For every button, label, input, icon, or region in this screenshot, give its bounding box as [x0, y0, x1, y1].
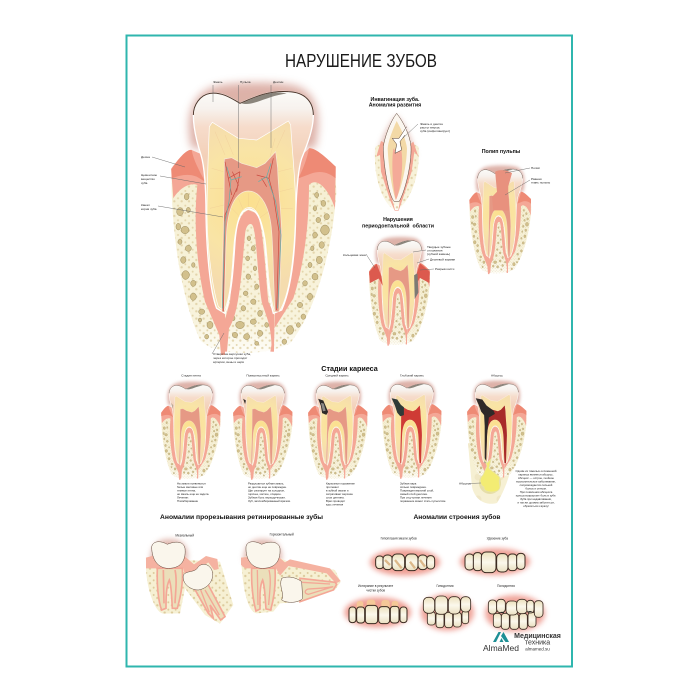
invagination callout: зуба (инфолинирует) [420, 129, 450, 133]
main tooth labels [141, 80, 284, 364]
main tooth labels: Эмаль [213, 80, 223, 84]
frame border [126, 36, 572, 666]
row: enamel hypoplasia [370, 536, 440, 576]
stage 2: surface caries: но дентин еще не поврежден. [248, 485, 287, 489]
periodontal labels: отложения [427, 248, 443, 252]
row: enamel hypoplasia: Гипоплазия эмали зубов [381, 536, 417, 540]
stage 1: spot: Пломбирование [177, 499, 199, 503]
periodontal labels: Кольцевая зона [343, 253, 366, 257]
stage 2: surface caries [233, 374, 293, 503]
stage 5: abscess: болью и отеком. [525, 486, 547, 490]
stage 1: spot [161, 374, 221, 503]
periodontal labels: Твердые зубные [427, 245, 451, 249]
retained teeth diagrams [146, 533, 341, 624]
stage 5: abscess: кариеса является абсцесс. [519, 472, 554, 476]
main tooth labels: Цементное [141, 173, 157, 177]
stage 3: middle caries: курс лечения [326, 502, 344, 506]
main tooth labels: вещество [141, 177, 155, 181]
row: abrasion: Истирание в результате [358, 584, 393, 588]
stage 1: spot: белые меловые или [177, 485, 204, 489]
stage 4: deep caries: Поврежден верхний слой, [400, 488, 434, 492]
row: hypodontia [421, 584, 474, 631]
stage 3: middle caries: протекает [326, 485, 340, 489]
main tooth labels: Канал [141, 203, 150, 207]
invagination callout: растут внутрь [420, 126, 440, 130]
main tooth labels: зуба [141, 181, 148, 185]
stage 2: surface caries: Щит реагирует на холодное, [248, 488, 285, 492]
heading: invagination: Инвагинация зуба. [371, 96, 420, 103]
retained teeth diagrams: Горизонтальный [270, 533, 294, 537]
heading: invagination: Аномалия развития [369, 102, 421, 108]
stage 5: abscess: Абсцесс [491, 374, 503, 378]
panel: caries stages [161, 364, 557, 508]
row: hypodontia: Гиподонтия [437, 584, 454, 588]
stage 2: surface caries: Зуб, запломбированный врачом. [248, 499, 291, 503]
stage 1: spot: но эмаль еще не задета. [177, 492, 209, 496]
company descriptor: Медицинская [514, 633, 561, 640]
stage 5: abscess: и так же должна заботиться, [517, 500, 555, 504]
stage 3: middle caries: затрагивает верхние [326, 492, 353, 496]
stage 2: surface caries: Разрушается зубная эмаль, [248, 482, 284, 486]
periodontal labels [343, 245, 455, 271]
row: polydontia [485, 584, 545, 632]
main tooth labels: артерии, вены и нерв [213, 360, 244, 364]
stage 4: deep caries: поражение может стать пульпитом. [400, 499, 446, 503]
heading: retained teeth: Аномалии прорезывания ретинированные зубы [160, 513, 323, 521]
stage 4: deep caries: самый слой дентина. [400, 492, 428, 496]
main tooth labels: Отверстие верхушки зуба, [213, 352, 251, 356]
main tooth labels: Десна [141, 155, 150, 159]
main tooth labels: Дентин [273, 80, 284, 84]
heading: structure anomalies: Аномалии строения зубов [414, 513, 500, 521]
periodontal tooth [369, 237, 430, 346]
heading: periodontal: Нарушения [383, 217, 413, 223]
main tooth labels: через которое проходят [213, 356, 248, 360]
stage 5: abscess: Абсцесс — острое, гнойное [518, 476, 554, 480]
stage 4: deep caries [382, 374, 446, 503]
stage 5: abscess: обратиться к врачу! [523, 504, 549, 508]
stage 3: middle caries: в зубной эмали и [326, 488, 349, 492]
invagination callout [403, 122, 450, 138]
row: polydontia: Полидонтия [497, 584, 515, 588]
stage 1: spot: На эмали появляются [177, 482, 206, 486]
company descriptor: техника [525, 640, 550, 646]
stage 2: surface caries: Поверхностный кариес [246, 374, 280, 378]
panel: pulp polyp [469, 149, 551, 274]
stage 3: middle caries: Врач проводит [326, 499, 346, 503]
stage 1: spot: Стадия пятна [181, 374, 201, 378]
retained teeth diagrams: Мезиальный [175, 534, 194, 538]
periodontal labels: Десневой карман [430, 258, 455, 262]
stage 4: deep caries: При отсутствии лечения [400, 496, 432, 500]
stage 5: abscess: сопровождается сильной [520, 483, 553, 487]
title: НАРУШЕНИЕ ЗУБОВ [285, 50, 437, 71]
stage 5: abscess: Абсцесс [459, 482, 471, 486]
row: tooth doubling [460, 536, 530, 575]
stage 3: middle caries: Кариозное поражение [326, 482, 355, 486]
periodontal labels: (зубной камень) [427, 252, 450, 256]
logo [483, 632, 561, 653]
invagination callout: Эмаль и дентин [420, 122, 443, 126]
main tooth labels: корня зуба [141, 207, 157, 211]
polyp labels [505, 166, 551, 195]
brand name: AlmaMed [483, 644, 519, 653]
row: abrasion: чистки зубов [366, 589, 385, 593]
invagination tooth [375, 113, 419, 211]
row: tooth doubling: Удвоение зуба [487, 536, 508, 540]
tooth rows [344, 536, 545, 632]
stage 3: middle caries: Средний кариес [325, 374, 349, 378]
polyp labels: ткань пульпы [531, 180, 551, 184]
main tooth diagram [171, 82, 336, 355]
stage 5: abscess: При появлении абсцесса [520, 490, 553, 494]
polyp labels: Полип [531, 166, 540, 170]
polyp tooth [469, 165, 531, 274]
stage 2: surface caries: горячее, кислое, сладкое. [248, 492, 282, 496]
panel: retained teeth [146, 513, 341, 624]
stage 4: deep caries: сильно повреждена. [400, 485, 427, 489]
stage 5: abscess: Одним из тяжелых осложнений [516, 469, 557, 473]
main tooth labels: Пульпа [240, 80, 251, 84]
stage 1: spot: Лечение: [177, 496, 189, 500]
stage 5: abscess [459, 374, 557, 508]
stage 4: deep caries: Глубокий кариес [400, 374, 424, 378]
stage 1: spot: темные пятна, [177, 488, 196, 492]
stage 2: surface caries: Зубная боль периодическая. [248, 496, 286, 500]
panel: periodontal [343, 217, 455, 346]
stage 3: middle caries: слои дентина. [326, 496, 345, 500]
stage 5: abscess: Зуба при надавливании, [520, 497, 552, 501]
stage 5: abscess: пульса возрастает боль в зубе. [516, 494, 557, 498]
row: abrasion [344, 584, 411, 627]
heading: polyp: Полип пульпы [482, 149, 521, 155]
periodontal labels: Разрыв кости [435, 267, 455, 271]
stage 3: middle caries [308, 374, 368, 506]
logo mark [493, 632, 509, 642]
panel: tooth structure anomalies [344, 513, 545, 632]
stage 4: deep caries: Зубная пара [400, 482, 417, 486]
heading: caries stages: Стадии кариеса [321, 364, 379, 373]
stage 5: abscess: воспалительное заболевание, [516, 480, 556, 484]
heading: periodontal: периодонтальной области [362, 222, 434, 230]
panel: invagination [369, 96, 450, 211]
polyp labels: Рваная [531, 177, 542, 181]
company descriptor: almamed.su [525, 646, 550, 652]
